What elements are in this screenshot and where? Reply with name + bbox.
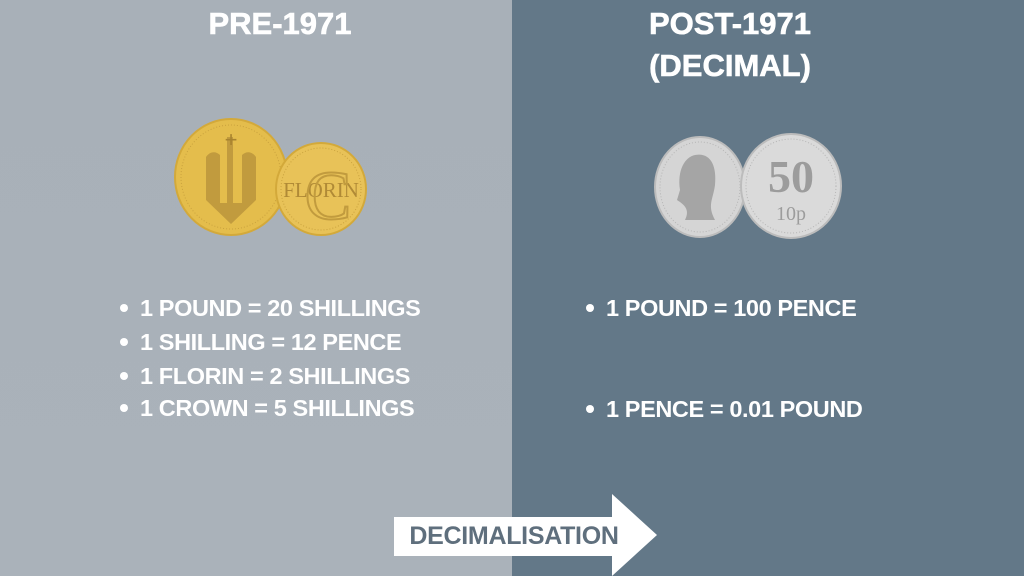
title: post-1971: (DECIMAL) (649, 48, 811, 83)
icon: silver coins (654, 133, 842, 239)
list: post-1971 conversions: 1 POUND = 100 PENCE (606, 295, 856, 321)
icon: gold coins: + (225, 127, 237, 152)
icon: gold coins (174, 118, 367, 236)
title: pre-1971: PRE-1971 (208, 6, 352, 41)
list: pre-1971 conversions (120, 295, 420, 421)
arrow: decimalisation (394, 494, 657, 576)
arrow: decimalisation: DECIMALISATION (409, 522, 619, 550)
list: post-1971 conversions: 1 PENCE = 0.01 POUND (606, 396, 862, 422)
list: post-1971 conversions (586, 295, 862, 422)
icon: silver coins: 50 (768, 151, 814, 202)
list: pre-1971 conversions: 1 POUND = 20 SHILLINGS (140, 295, 420, 321)
list: pre-1971 conversions: 1 SHILLING = 12 PENCE (140, 329, 401, 355)
icon: silver coins: 10p (776, 203, 806, 225)
list: pre-1971 conversions: 1 CROWN = 5 SHILLINGS (140, 395, 414, 421)
icon: gold coins: FLORIN (283, 178, 359, 202)
icon: gold coins: C (305, 158, 351, 235)
title: post-1971: POST-1971 (649, 6, 811, 41)
list: pre-1971 conversions: 1 FLORIN = 2 SHILLINGS (140, 363, 410, 389)
title: post-1971 (649, 6, 811, 83)
